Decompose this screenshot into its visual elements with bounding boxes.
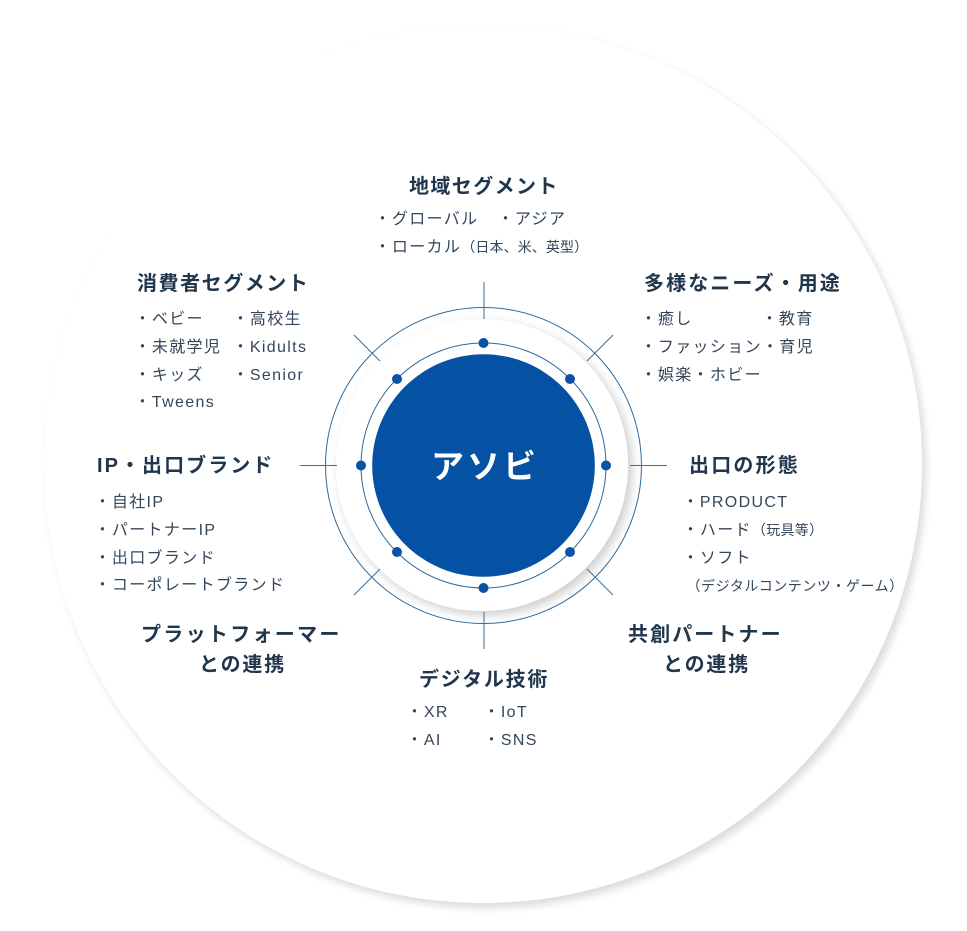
panel: 消費者セグメント: ・高校生 <box>232 311 302 328</box>
panel: デジタル技術: ・IoT <box>484 704 528 721</box>
panel: 多様なニーズ・用途: ・教育 <box>762 311 814 328</box>
panel: 多様なニーズ・用途 <box>640 272 842 384</box>
list: ・自社IP <box>94 494 164 511</box>
heading line 1: プラットフォーマー <box>141 624 342 646</box>
panel: プラットフォーマーとの連携 <box>141 624 342 676</box>
panel: 多様なニーズ・用途: ・娯楽・ホビー <box>640 367 762 384</box>
panel: デジタル技術: ・AI <box>406 732 442 749</box>
panel: 消費者セグメント: ・Kidults <box>232 339 307 356</box>
blue core circle <box>372 354 595 577</box>
heading: 多様なニーズ・用途 <box>644 273 842 295</box>
heading: 出口の形態 <box>689 455 800 477</box>
list: ・グローバル <box>374 211 478 228</box>
panel: 消費者セグメント: ・Tweens <box>134 394 215 411</box>
heading: IP・出口ブランド <box>97 455 274 477</box>
white raised disc <box>336 319 628 611</box>
list: ・PRODUCT <box>682 494 788 511</box>
heading: 消費者セグメント <box>137 273 309 295</box>
panel: 出口の形態: ・ハード（玩具等） <box>682 522 823 539</box>
panel: IP・出口ブランド: ・出口ブランド <box>94 550 216 567</box>
panel: 地域セグメント <box>374 176 588 256</box>
panel: 消費者セグメント: ・キッズ <box>134 367 204 384</box>
heading line 1: 共創パートナー <box>628 624 783 646</box>
panel: デジタル技術 <box>406 668 549 749</box>
heading line 2: との連携 <box>199 654 286 676</box>
outer ring <box>326 308 642 624</box>
panel: IP・出口ブランド <box>94 454 285 594</box>
panel: 多様なニーズ・用途: ・ファッション・育児 <box>640 339 814 356</box>
list: ・ベビー <box>134 311 204 328</box>
panel: デジタル技術: ・SNS <box>484 732 538 749</box>
panel: 地域セグメント: ・ローカル（日本、米、英型） <box>374 239 588 256</box>
panel: 消費者セグメント <box>134 272 309 411</box>
panel: 地域セグメント: ・アジア <box>498 211 566 228</box>
heading: 地域セグメント <box>409 176 559 198</box>
panel: 出口の形態: ・ソフト <box>682 550 752 567</box>
panel: 出口の形態 <box>682 454 904 594</box>
panel: IP・出口ブランド: ・コーポレートブランド <box>94 577 285 594</box>
inner ring <box>361 343 606 588</box>
heading line 2: との連携 <box>663 654 750 676</box>
panel: 消費者セグメント: ・未就学児 <box>134 339 221 356</box>
spokes <box>300 282 667 649</box>
panel: IP・出口ブランド: ・パートナーIP <box>94 522 216 539</box>
list: ・XR <box>406 704 449 721</box>
heading: デジタル技術 <box>419 669 549 691</box>
core label: アソビ <box>431 448 539 485</box>
panel: 消費者セグメント: ・Senior <box>232 367 304 384</box>
panel: 出口の形態: （デジタルコンテンツ・ゲーム） <box>686 578 904 594</box>
panel: 共創パートナーとの連携 <box>628 624 783 676</box>
ring dots <box>356 338 611 593</box>
list: ・癒し <box>640 311 693 328</box>
